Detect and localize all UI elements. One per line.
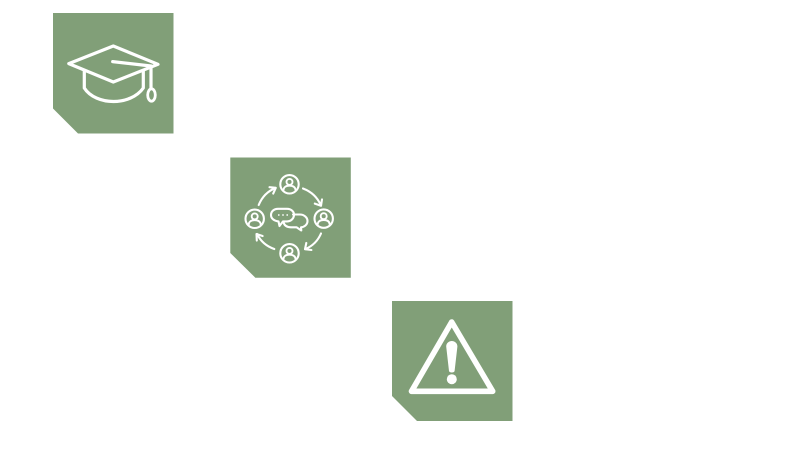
icon: people exchange circle bbox=[246, 175, 333, 262]
icon: warning triangle bbox=[412, 322, 493, 391]
panel: graduation bbox=[53, 13, 174, 134]
panel: warning bbox=[392, 301, 512, 421]
icon: graduation cap bbox=[69, 46, 158, 102]
panel: communication bbox=[230, 158, 351, 278]
